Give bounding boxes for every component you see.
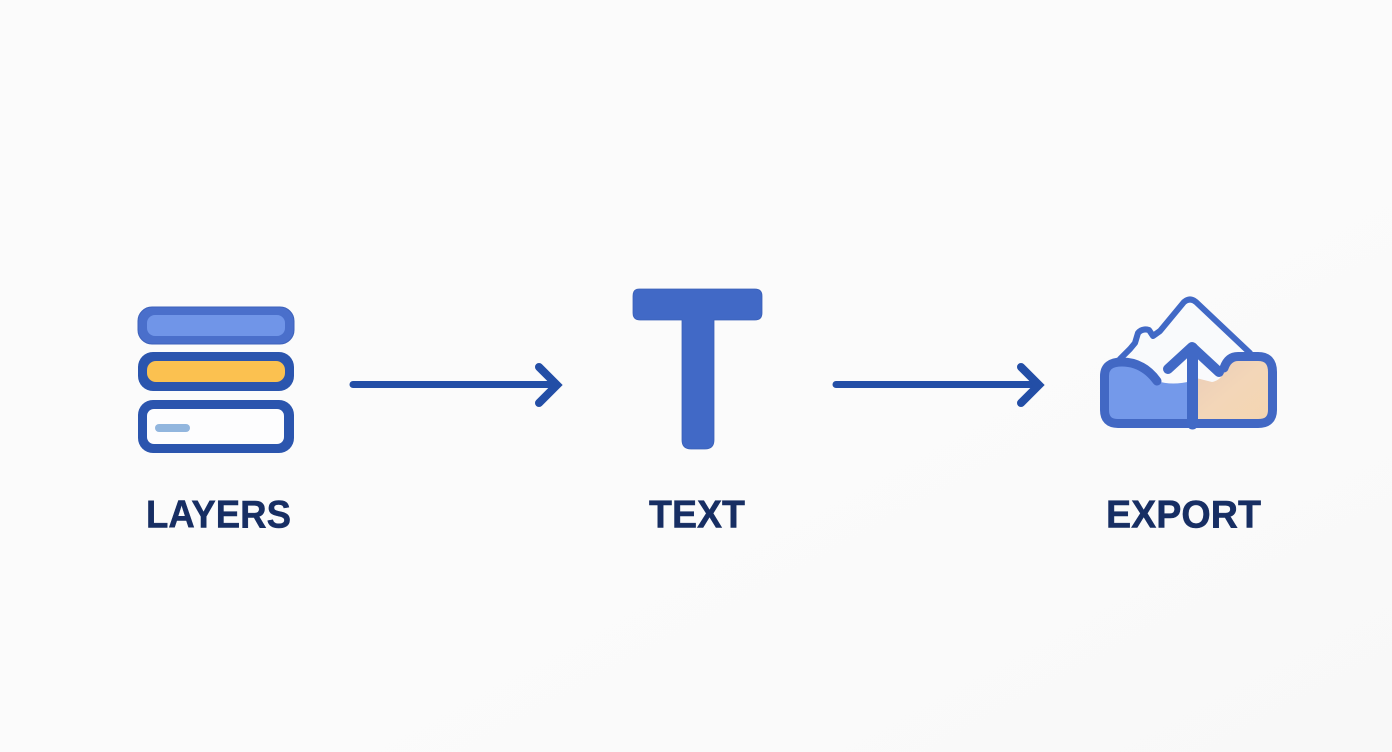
label: text: TEXT bbox=[649, 494, 745, 536]
icon: export image with upload arrow bbox=[1104, 300, 1272, 424]
icon: layers stack bbox=[138, 307, 294, 453]
upload arrow bbox=[1168, 347, 1219, 424]
right peach panel bbox=[1192, 357, 1272, 424]
top layer bar bbox=[138, 307, 294, 344]
label: export: EXPORT bbox=[1106, 494, 1261, 536]
middle layer bar bbox=[138, 352, 294, 391]
icon: letter T bbox=[633, 289, 762, 449]
bottom layer bar bbox=[138, 400, 294, 453]
label: layers: LAYERS bbox=[146, 494, 291, 536]
arrow: text to export bbox=[836, 367, 1039, 403]
mountain outline bbox=[1120, 300, 1250, 385]
left blue panel bbox=[1104, 365, 1192, 424]
arrow: layers to text bbox=[353, 367, 557, 403]
